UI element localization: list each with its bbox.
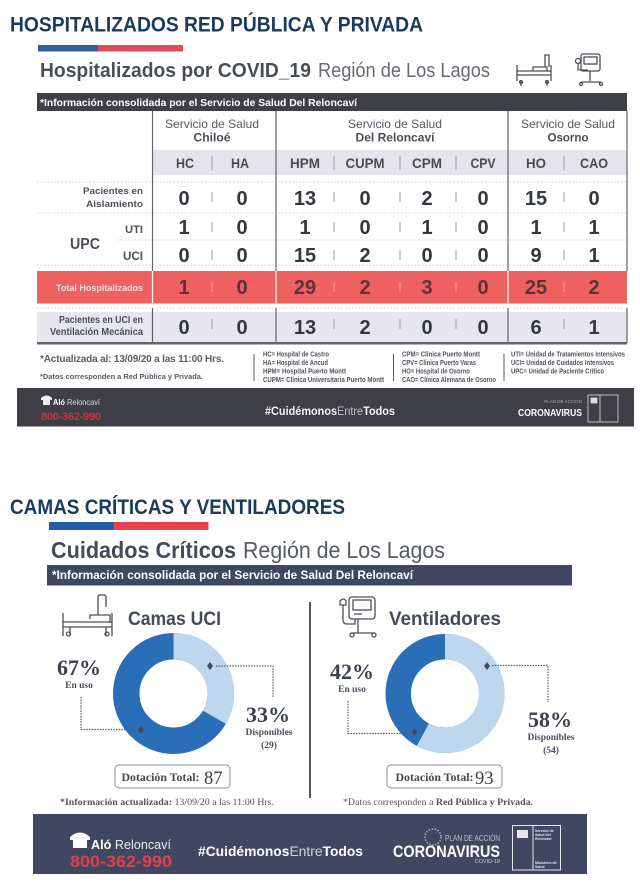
callout: disponibles 33%: (29) xyxy=(261,740,277,751)
flag stripe 2 xyxy=(49,522,208,530)
callout: en uso 67% xyxy=(57,655,144,734)
row: aislamiento: 0 xyxy=(178,188,190,210)
legend: abbreviations: HC= Hospital de Castro xyxy=(263,352,329,358)
row: UTI: 1 xyxy=(299,217,311,239)
coronavirus plan: CORONAVIRUS xyxy=(393,843,500,861)
panel: hospitalizados infographic xyxy=(17,45,634,426)
heading: camas críticas: CAMAS CRÍTICAS Y VENTILADORES xyxy=(10,496,345,519)
row: UCI: 0 xyxy=(236,245,248,267)
government logo: Ministerio de xyxy=(535,861,557,865)
callout: disponibles 58%: Disponibles xyxy=(528,733,575,743)
row: ventilación mecánica: 0 xyxy=(421,317,433,339)
total box xyxy=(387,765,502,789)
row labels: Pacientes en UCI en xyxy=(59,315,143,326)
row: total hospitalizados: 3 xyxy=(421,277,433,299)
row: UTI: 1 xyxy=(588,217,600,239)
flag stripe xyxy=(38,45,183,52)
column headers: CAO xyxy=(580,155,608,171)
heading: camas UCI: Camas UCI xyxy=(128,609,221,630)
row labels xyxy=(50,186,143,338)
total box: Dotación Total: xyxy=(122,772,200,784)
row: ventilación mecánica: 1 xyxy=(588,317,600,339)
row: aislamiento: 0 xyxy=(236,188,248,210)
helpline number: 800-362-990 xyxy=(70,853,172,871)
heading: hospitalizados: HOSPITALIZADOS RED PÚBLICA Y PRIVADA xyxy=(10,12,423,36)
icon: ventilator xyxy=(576,54,602,86)
row labels: UPC xyxy=(70,236,100,253)
service headers: Servicio de Salud xyxy=(521,117,615,131)
info bar: *Información consolidada por el Servicio de Salud Del Reloncaví xyxy=(40,97,358,109)
row: aislamiento: 15 xyxy=(525,188,547,210)
government logo xyxy=(512,826,560,870)
coronavirus plan xyxy=(393,829,500,865)
legend: abbreviations xyxy=(254,352,625,384)
helpline name: Aló Reloncaví xyxy=(53,397,101,407)
government logo: Salud xyxy=(535,865,545,869)
callout: disponibles 58%: (54) xyxy=(543,745,559,756)
service headers xyxy=(165,117,615,144)
callout: disponibles 58% xyxy=(484,662,575,756)
icon: phone xyxy=(70,832,90,848)
row: UTI xyxy=(178,217,600,239)
service headers: Servicio de Salud xyxy=(348,117,442,131)
callout: disponibles 33% xyxy=(207,662,293,751)
update note xyxy=(40,354,224,381)
row: UCI: 2 xyxy=(359,245,371,267)
callout: en uso 42%: 42% xyxy=(330,659,374,684)
update note 2: *Información actualizada: 13/09/20 a las 11:00 Hrs. xyxy=(60,798,274,808)
coronavirus plan xyxy=(518,398,582,419)
row: total hospitalizados: 0 xyxy=(477,277,489,299)
callout: en uso 42%: En uso xyxy=(338,685,366,695)
row: UTI: 1 xyxy=(530,217,542,239)
callout: en uso 42% xyxy=(330,659,418,736)
government logo: Reloncaví xyxy=(535,837,553,841)
row: aislamiento: 0 xyxy=(477,188,489,210)
column headers: HA xyxy=(231,155,249,171)
total box: 87 xyxy=(204,769,222,789)
row labels: Aislamiento xyxy=(86,199,143,210)
donut chart: camas UCI xyxy=(126,646,221,741)
row: ventilación mecánica: 0 xyxy=(236,317,248,339)
row: UTI: 1 xyxy=(421,217,433,239)
callout: disponibles 58%: 58% xyxy=(528,707,572,732)
row labels: Total Hospitalizados xyxy=(56,283,143,294)
legend: abbreviations: UCI= Unidad de Cuidados Intensivos xyxy=(511,360,614,367)
panel: camas UCI xyxy=(57,595,293,789)
service headers: Chiloé xyxy=(194,130,231,144)
row: total hospitalizados xyxy=(178,277,600,299)
column headers: HC xyxy=(176,155,194,171)
footer band: bottom xyxy=(33,814,587,874)
row: UCI: 0 xyxy=(421,245,433,267)
divider xyxy=(309,602,311,798)
panel title 2: Cuidados Críticos xyxy=(51,537,236,563)
callout: disponibles 33%: Disponibles xyxy=(246,728,293,738)
column headers xyxy=(176,155,608,171)
legend: abbreviations: CPM= Clínica Puerto Montt xyxy=(402,352,481,358)
row: aislamiento: 13 xyxy=(294,188,316,210)
row: total hospitalizados: 25 xyxy=(525,277,547,299)
column headers: HPM xyxy=(290,155,320,171)
service headers: Servicio de Salud xyxy=(165,117,259,131)
row: UCI xyxy=(178,245,600,267)
total box: Dotación Total: xyxy=(396,772,474,784)
column headers: HO xyxy=(526,155,546,171)
row: ventilación mecánica: 2 xyxy=(359,317,371,339)
update note: *Actualizada al: 13/09/20 a las 11:00 Hrs. xyxy=(40,354,224,365)
row labels: Ventilación Mecánica xyxy=(50,327,143,338)
icon: ventilator xyxy=(340,597,376,637)
helpline number: 800-362-990 xyxy=(41,411,101,423)
panel region subtitle: Región de Los Lagos xyxy=(318,60,490,82)
legend: abbreviations: CAO= Clínica Alemana de Osorno xyxy=(402,377,496,384)
row: UCI: 0 xyxy=(477,245,489,267)
row: UCI: 0 xyxy=(178,245,190,267)
row: total hospitalizados: 29 xyxy=(294,277,316,299)
callout: en uso 67%: En uso xyxy=(65,681,93,691)
coronavirus plan: PLAN DE ACCIÓN xyxy=(544,398,582,404)
coronavirus plan: CORONAVIRUS xyxy=(518,408,582,419)
row: ventilación mecánica: 6 xyxy=(530,317,542,339)
info bar 2 xyxy=(47,565,572,586)
header band xyxy=(153,150,627,175)
legend: abbreviations: HA= Hospital de Ancud xyxy=(263,360,328,367)
row: total hospitalizados: 1 xyxy=(178,277,190,299)
total box: 93 xyxy=(475,769,494,789)
government logo: Salud Del xyxy=(535,833,551,837)
row: UCI: 15 xyxy=(294,245,316,267)
column headers: CPM xyxy=(412,155,442,171)
column headers: CUPM xyxy=(346,155,384,171)
service headers: Osorno xyxy=(548,130,588,144)
government logo xyxy=(588,395,618,422)
legend: abbreviations: HO= Hospital de Osorno xyxy=(402,368,470,376)
row: total hospitalizados: 0 xyxy=(236,277,248,299)
icon: bed xyxy=(517,55,551,86)
donut chart: ventiladores xyxy=(398,647,492,740)
legend: abbreviations: UPC= Unidad de Paciente Crítico xyxy=(511,368,604,376)
table xyxy=(37,111,627,344)
panel region subtitle 2: Región de Los Lagos xyxy=(243,537,445,563)
heading: ventiladores: Ventiladores xyxy=(389,609,501,630)
legend: abbreviations: CPV= Clínica Puerto Varas xyxy=(402,360,476,367)
coronavirus plan: PLAN DE ACCIÓN xyxy=(445,834,500,843)
panel title: Hospitalizados por COVID_19 xyxy=(40,60,311,82)
info bar 2: *Información consolidada por el Servicio de Salud Del Reloncaví xyxy=(52,568,414,582)
row: total hospitalizados: 2 xyxy=(359,277,371,299)
row: UTI: 0 xyxy=(477,217,489,239)
row: UTI: 1 xyxy=(178,217,190,239)
icon: phone xyxy=(41,396,52,405)
icon: hospital bed xyxy=(63,595,112,636)
government logo: Servicio de xyxy=(535,829,554,833)
row: ventilación mecánica: 0 xyxy=(477,317,489,339)
row labels: UCI xyxy=(123,249,143,263)
legend: abbreviations: HPM= Hospital Puerto Montt xyxy=(263,368,347,376)
row: aislamiento: 2 xyxy=(421,188,433,210)
row: UCI: 1 xyxy=(588,245,600,267)
row: ventilación mecánica: 13 xyxy=(294,317,316,339)
row labels: UTI xyxy=(125,224,143,236)
service headers: Del Reloncaví xyxy=(356,130,435,144)
legend: abbreviations: CUPM= Clínica Universitaria Puerto Montt xyxy=(263,377,385,384)
hashtag: #CuidémonosEntreTodos xyxy=(265,404,395,418)
ventilation row band xyxy=(37,312,627,342)
row: ventilación mecánica xyxy=(178,317,600,339)
callout: disponibles 33%: 33% xyxy=(246,702,290,727)
info bar xyxy=(37,93,627,111)
row: aislamiento: 0 xyxy=(359,188,371,210)
total row band xyxy=(37,271,627,304)
update note: *Datos corresponden a Red Pública y Privada. xyxy=(40,372,203,381)
panel: ventiladores xyxy=(330,597,575,789)
coronavirus plan: COVID-19 xyxy=(475,859,500,865)
row: UCI: 9 xyxy=(530,245,542,267)
row labels: Pacientes en xyxy=(83,186,143,197)
helpline name: Aló Reloncaví xyxy=(91,837,171,852)
row: UTI: 0 xyxy=(359,217,371,239)
row: aislamiento: 0 xyxy=(588,188,600,210)
column headers: CPV xyxy=(470,155,496,171)
callout: en uso 67%: 67% xyxy=(57,655,101,680)
total box xyxy=(115,765,230,789)
hashtag: #CuidémonosEntreTodos xyxy=(198,843,363,859)
footer band: top xyxy=(17,388,634,426)
row: total hospitalizados: 2 xyxy=(588,277,600,299)
row: ventilación mecánica: 0 xyxy=(178,317,190,339)
row: aislamiento xyxy=(178,188,600,210)
row: UTI: 0 xyxy=(236,217,248,239)
data note: *Datos corresponden a Red Pública y Privada. xyxy=(343,798,533,808)
